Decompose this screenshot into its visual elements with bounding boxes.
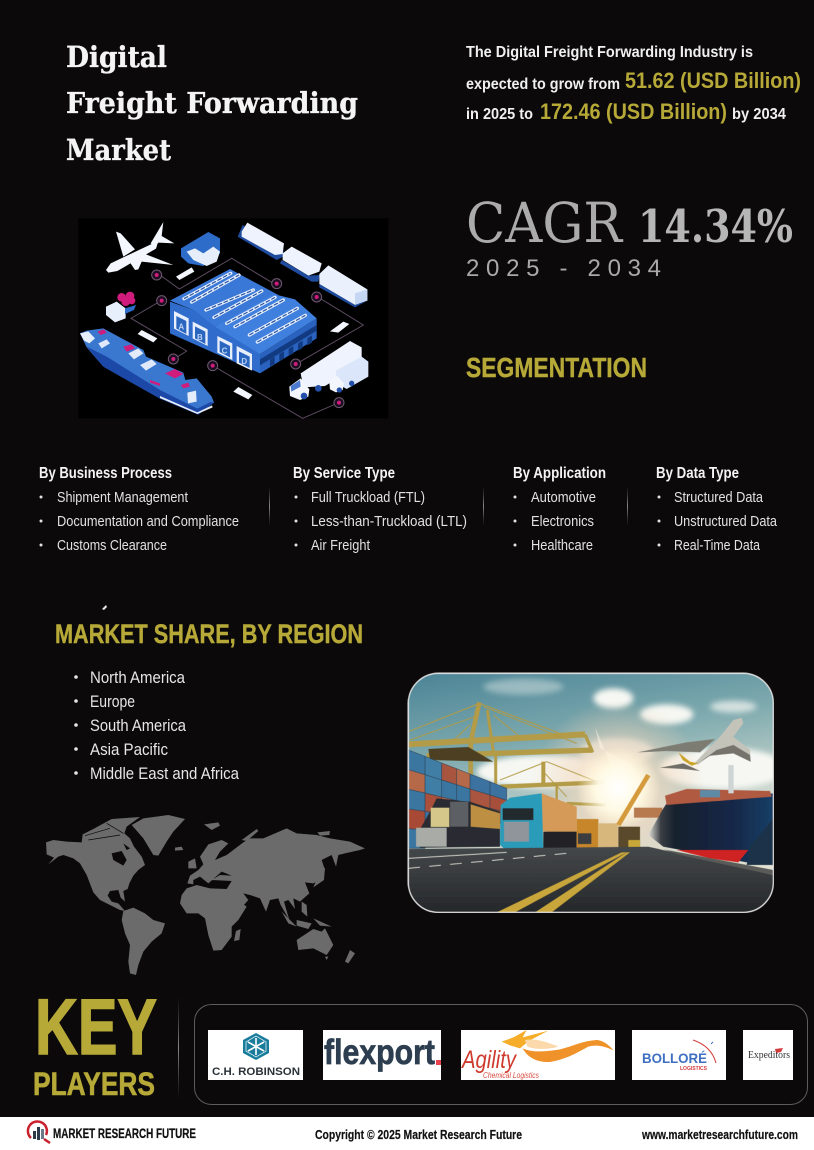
logo: C.H. Robinson: C.H. ROBINSON <box>212 1066 300 1078</box>
illustration: logistics warehouse network <box>78 218 388 418</box>
logo: Bolloré <box>632 1030 726 1080</box>
segment: by data type: Structured Data <box>674 489 764 506</box>
segment: by application <box>513 465 606 554</box>
title: Freight Forwarding <box>66 86 358 120</box>
market growth summary: in 2025 to <box>466 106 533 123</box>
world map <box>46 815 365 975</box>
blue truck <box>500 793 577 851</box>
segment: by business process: Customs Clearance <box>57 537 167 554</box>
heading: key players <box>33 982 157 1102</box>
logo: Agility: Agility <box>460 1046 517 1074</box>
logo: Expeditors: Expeditors <box>748 1050 790 1061</box>
container ship <box>80 328 214 415</box>
CAGR figure: 2025 - 2034 <box>466 255 661 282</box>
segment: by business process: Shipment Management <box>57 489 189 506</box>
segment: by business process: By Business Process <box>39 465 172 482</box>
market growth summary: expected to grow from <box>466 76 620 93</box>
footer logo: MARKET RESEARCH FUTURE <box>53 1126 196 1141</box>
title <box>66 40 358 167</box>
train and containers <box>238 223 367 307</box>
loading dock <box>176 232 220 280</box>
segment: by service type <box>293 465 467 554</box>
container stacks <box>408 750 507 848</box>
logo: Flexport: flexport <box>324 1033 435 1072</box>
logo: Bolloré: BOLLORÉ <box>642 1050 707 1066</box>
CAGR figure: CAGR <box>466 191 623 255</box>
footer logo <box>28 1121 196 1143</box>
plane <box>106 222 174 273</box>
warehouse: A <box>178 322 184 331</box>
warehouse <box>170 269 317 373</box>
segment: by data type <box>656 465 778 554</box>
warehouse: B <box>197 333 203 342</box>
container ship <box>648 765 773 865</box>
segment: by data type: Real-Time Data <box>674 537 761 554</box>
region list: South America <box>90 716 186 735</box>
warehouse: D <box>241 357 247 366</box>
logo: Agility <box>460 1030 615 1080</box>
parcels <box>106 292 136 322</box>
region list <box>74 668 239 783</box>
segment: by service type: By Service Type <box>293 465 395 482</box>
photo: transport and port scene <box>408 673 787 912</box>
heading: market share by region: MARKET SHARE, BY REGION <box>55 619 363 649</box>
sun glow <box>578 728 654 823</box>
segment: by service type: Full Truckload (FTL) <box>311 489 425 506</box>
segment: by data type: Unstructured Data <box>674 513 778 530</box>
segment: by service type: Less-than-Truckload (LTL) <box>311 513 467 530</box>
logo: Agility: Chemical Logistics <box>483 1070 540 1080</box>
copyright: Copyright © 2025 Market Research Future <box>315 1127 522 1142</box>
heading: key players: PLAYERS <box>33 1066 155 1102</box>
road <box>408 847 773 912</box>
market growth summary <box>466 44 801 124</box>
segment: by application: Healthcare <box>531 537 593 554</box>
title: Market <box>66 133 172 167</box>
segment: by application: Electronics <box>531 513 594 530</box>
locomotive <box>416 798 500 848</box>
plane <box>637 718 751 771</box>
trucks <box>289 341 368 400</box>
segment: by service type: Air Freight <box>311 537 371 554</box>
CAGR figure <box>466 191 793 282</box>
segment: by business process: Documentation and Compliance <box>57 513 239 530</box>
segment: by application: By Application <box>513 465 606 482</box>
logo: C.H. Robinson <box>208 1030 303 1080</box>
title: Digital <box>66 40 167 74</box>
footer bar <box>0 1117 814 1150</box>
region list: North America <box>90 668 185 687</box>
warehouse: C <box>222 346 228 355</box>
gantry cranes <box>408 702 607 805</box>
market growth summary: by 2034 <box>732 106 786 123</box>
heading: key players: KEY <box>35 982 157 1071</box>
second truck and cargo <box>577 775 662 851</box>
logo: Bolloré: LOGISTICS <box>680 1066 707 1072</box>
market growth summary: The Digital Freight Forwarding Industry is <box>466 44 753 61</box>
segment: by data type: By Data Type <box>656 465 739 482</box>
market growth summary: 172.46 (USD Billion) <box>540 99 727 124</box>
segment: by application: Automotive <box>531 489 596 506</box>
direction arrows <box>138 322 349 399</box>
region list: Middle East and Africa <box>90 764 239 783</box>
region list: Europe <box>90 692 135 711</box>
segment: by business process <box>39 465 239 554</box>
region list: Asia Pacific <box>90 740 168 759</box>
logo: Expeditors <box>743 1030 793 1080</box>
panel: key player logos <box>194 1004 808 1104</box>
heading: segmentation: SEGMENTATION <box>466 352 647 383</box>
